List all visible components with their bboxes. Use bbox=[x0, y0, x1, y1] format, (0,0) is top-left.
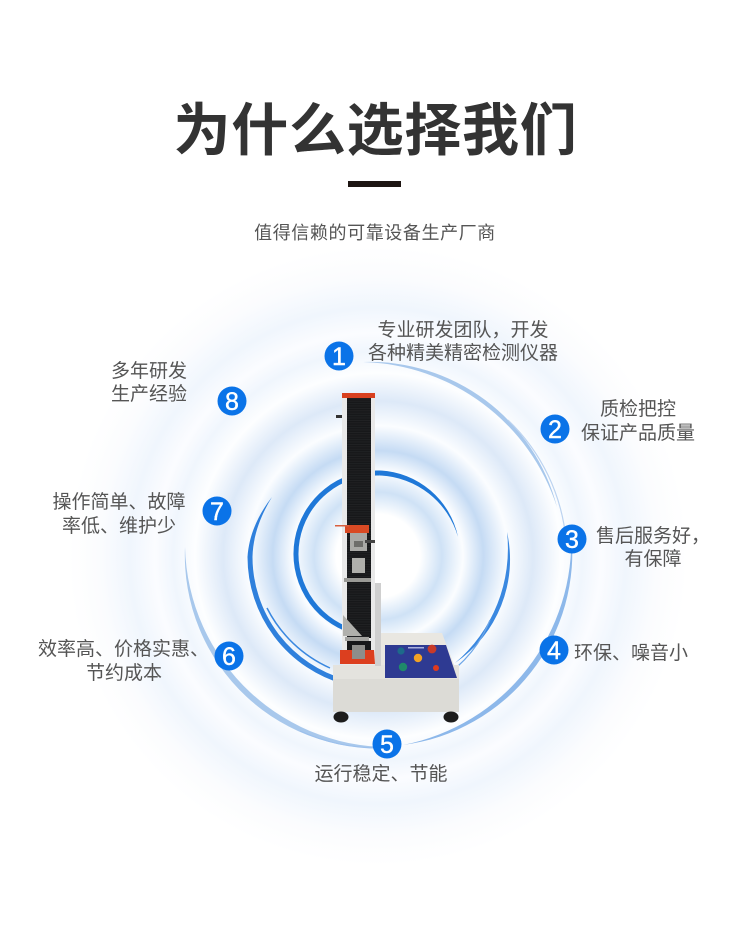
label 1: 专业研发团队，开发 bbox=[377, 319, 549, 341]
label 7: 率低、维护少 bbox=[62, 515, 176, 537]
top red cap bbox=[342, 393, 375, 398]
number badge 8: 8 bbox=[225, 388, 239, 416]
number badge 6 bbox=[214, 642, 244, 671]
title underline bbox=[348, 181, 401, 187]
outer arc top right bbox=[363, 362, 557, 507]
label 2: 质检把控 bbox=[600, 398, 676, 420]
lower wedge bbox=[343, 615, 362, 636]
machine base body bbox=[333, 665, 459, 712]
label 8: 多年研发 bbox=[111, 360, 187, 382]
label 1: 各种精美精密检测仪器 bbox=[368, 342, 558, 364]
middle clamp bbox=[352, 558, 365, 573]
item 1 bbox=[324, 319, 558, 371]
title: 为什么选择我们 bbox=[174, 99, 577, 163]
label 4: 环保、噪音小 bbox=[574, 642, 688, 664]
button: red lamp bbox=[433, 665, 439, 671]
machine base upper surface bbox=[378, 633, 459, 678]
middle arc left tapered end bbox=[248, 497, 272, 557]
number badge 1: 1 bbox=[332, 343, 346, 371]
label 2: 保证产品质量 bbox=[581, 422, 695, 444]
upper clamp slot bbox=[354, 541, 363, 547]
label 3: 有保障 bbox=[624, 548, 682, 570]
crosshead bbox=[345, 525, 369, 533]
label 3: 售后服务好， bbox=[596, 525, 710, 547]
inner arc bbox=[296, 473, 380, 631]
column frame bbox=[342, 393, 375, 665]
button: green bbox=[399, 663, 407, 671]
item 7 bbox=[52, 491, 232, 537]
item 6 bbox=[38, 638, 244, 684]
button: emergency red bbox=[428, 645, 436, 653]
middle clamp disc bbox=[344, 578, 371, 582]
rear support bbox=[375, 583, 381, 666]
left foot bbox=[334, 712, 348, 722]
label 7: 操作简单、故障 bbox=[52, 491, 186, 513]
machine base front shade bbox=[333, 679, 459, 712]
number badge 7: 7 bbox=[210, 498, 224, 526]
plate clamp bbox=[352, 645, 365, 659]
number badge 2 bbox=[540, 414, 570, 444]
concentric glow rings bbox=[68, 246, 688, 866]
right foot bbox=[444, 712, 458, 722]
item 8 bbox=[111, 360, 246, 416]
label 5: 运行稳定、节能 bbox=[314, 763, 448, 785]
item 3 bbox=[558, 524, 710, 570]
panel heading strip bbox=[408, 647, 424, 648]
outer arc bottom echo bbox=[300, 731, 385, 748]
item 2 bbox=[540, 398, 695, 444]
outer arc lower left bbox=[185, 547, 400, 748]
black lower column bbox=[347, 641, 371, 651]
inner arc tapered end bbox=[380, 470, 458, 537]
subtitle: 值得信赖的可靠设备生产厂商 bbox=[254, 223, 496, 243]
testing machine bbox=[333, 393, 459, 722]
middle arc left bbox=[250, 557, 345, 682]
number badge 5: 5 bbox=[380, 731, 394, 759]
middle arc right bbox=[455, 532, 510, 663]
outer arc thin echo bbox=[508, 420, 566, 540]
item 5 bbox=[314, 730, 448, 785]
label 8: 生产经验 bbox=[111, 383, 187, 405]
number badge 2: 2 bbox=[548, 416, 562, 444]
red base plate bbox=[340, 650, 375, 664]
number badge 3: 3 bbox=[565, 526, 579, 554]
number badge 3 bbox=[558, 524, 586, 554]
label 6: 节约成本 bbox=[86, 662, 162, 684]
middle arc echo line bbox=[267, 608, 330, 668]
clamp handle bbox=[365, 540, 375, 543]
number badge 4: 4 bbox=[547, 637, 561, 665]
crosshead arm bbox=[335, 525, 349, 526]
column black screw cover bbox=[347, 398, 371, 638]
item 4 bbox=[540, 636, 688, 665]
lower clamp disc bbox=[345, 637, 369, 641]
number badge 6: 6 bbox=[222, 643, 236, 671]
button: yellow lamp bbox=[414, 654, 422, 662]
upper clamp bbox=[350, 533, 367, 551]
side knob bbox=[336, 415, 342, 418]
blue control panel bbox=[385, 645, 457, 678]
middle arc right echo line bbox=[457, 620, 490, 667]
number badge 4 bbox=[540, 636, 568, 665]
label 6: 效率高、价格实惠、 bbox=[38, 638, 209, 660]
number badge 7 bbox=[202, 496, 232, 526]
concentric arcs bbox=[185, 362, 572, 748]
number badge 1 bbox=[324, 342, 354, 371]
outer arc lower right bbox=[403, 530, 572, 745]
button: blue green top bbox=[397, 647, 405, 655]
